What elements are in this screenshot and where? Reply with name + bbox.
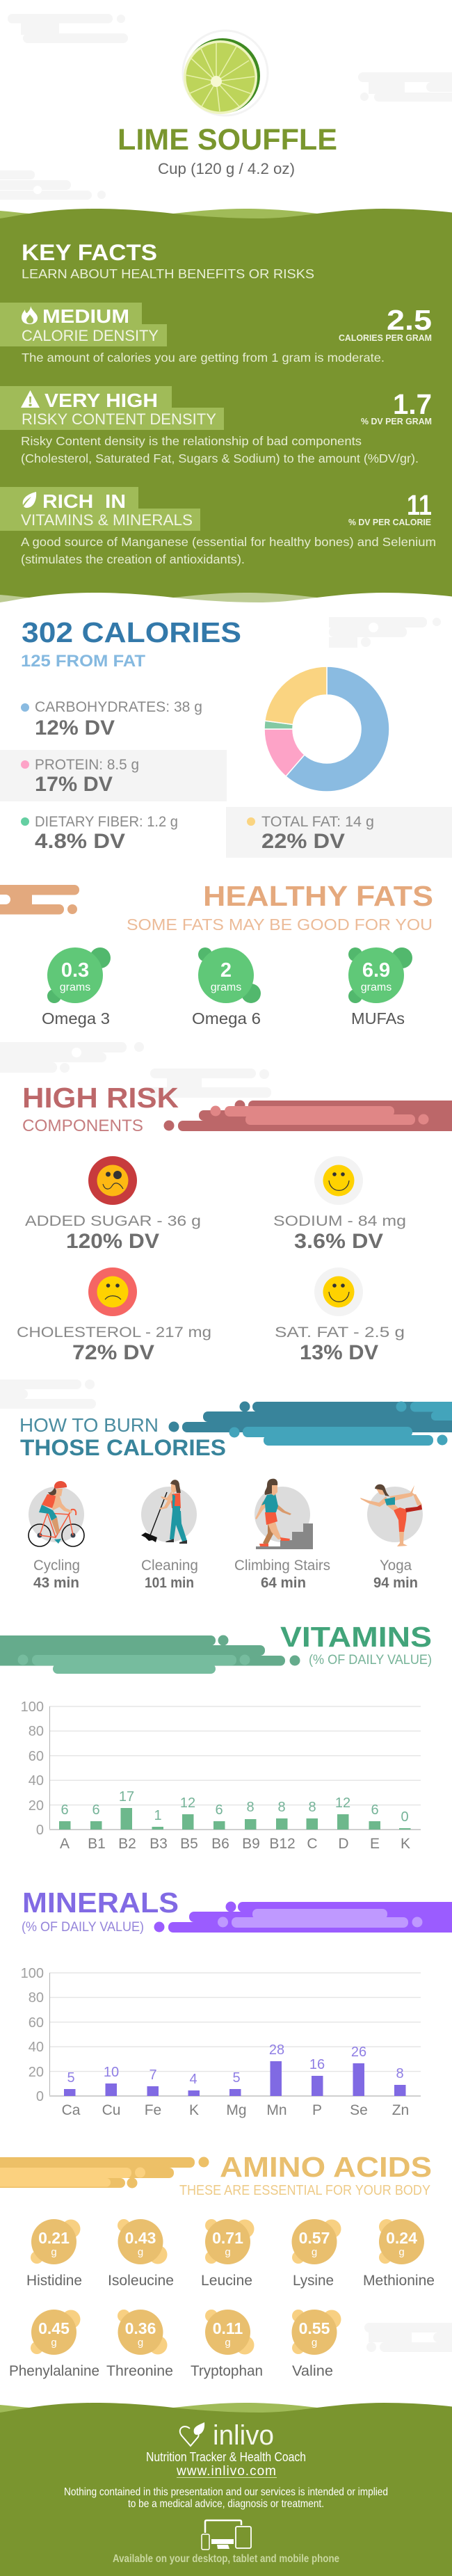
description: risky content: (Cholesterol, Saturated Fat, Sugars & Sodium) to the amount (%DV/gr). <box>21 451 419 465</box>
icon: warning triangle <box>21 390 40 408</box>
bar chart: minerals: 100 <box>21 1966 44 1981</box>
heading: those calories: THOSE CALORIES <box>20 1435 226 1460</box>
activity: cycling: 43 min <box>33 1575 79 1591</box>
protein entry: PROTEIN: 8.5 g <box>35 757 139 773</box>
bar chart: vitamins: K <box>401 1836 410 1852</box>
omega 6 badge: Omega 6 <box>192 1009 261 1027</box>
background clouds: header <box>0 14 452 200</box>
bar chart: minerals: Zn <box>392 2102 409 2118</box>
panel: vitamins <box>21 1621 432 1852</box>
tryptophan badge <box>191 2310 263 2379</box>
activity: climbing stairs: 64 min <box>261 1575 306 1591</box>
isoleucine badge: Isoleucine <box>108 2273 174 2289</box>
bar chart: minerals: Se <box>350 2102 368 2118</box>
heading: how to burn: HOW TO BURN <box>19 1414 159 1436</box>
bar chart: minerals: Mg <box>226 2102 247 2118</box>
leucine badge: 0.71 <box>212 2229 243 2247</box>
bar chart: minerals: 20 <box>29 2065 44 2080</box>
bar chart: vitamins: 80 <box>29 1724 44 1739</box>
icon: desktop tablet and phone <box>202 2520 251 2550</box>
section banner: high risk <box>164 1101 452 1131</box>
lysine badge: 0.57 <box>299 2229 330 2247</box>
tryptophan badge: g <box>225 2337 231 2349</box>
bar chart: minerals: 26 <box>351 2045 366 2060</box>
bar chart: vitamins: 1 <box>154 1808 162 1823</box>
panel: healthy fats <box>42 880 433 1027</box>
leucine badge: Leucine <box>201 2273 252 2289</box>
label boxes: vitamins and minerals <box>0 487 200 531</box>
description: vitamins and minerals: A good source of Manganese (essential for healthy bones) and Selenium <box>21 535 436 549</box>
bar chart: vitamins: B9 <box>242 1836 260 1852</box>
section banner: healthy fats <box>0 885 79 914</box>
bar chart: minerals <box>21 1966 421 2118</box>
bar chart: vitamins: B12 <box>269 1836 296 1852</box>
lysine badge <box>292 2219 341 2289</box>
heading: high risk: HIGH RISK <box>22 1082 179 1114</box>
activity: climbing stairs: Climbing Stairs <box>234 1558 330 1574</box>
phenylalanine badge: g <box>51 2337 57 2349</box>
donut chart <box>264 666 389 792</box>
omega 6 badge: 2 <box>220 959 232 982</box>
bar chart: minerals: 10 <box>104 2065 119 2080</box>
bar chart: minerals: P <box>312 2102 322 2118</box>
panel: minerals <box>21 1887 421 2118</box>
bar chart: vitamins: 20 <box>29 1798 44 1814</box>
subheading: healthy fats: SOME FATS MAY BE GOOD FOR YOU <box>127 915 433 934</box>
section banner: amino acids <box>0 2157 209 2189</box>
dietary fiber entry: DIETARY FIBER: 1.2 g <box>35 814 178 830</box>
bar chart: vitamins: 6 <box>92 1802 100 1818</box>
section banner: minerals <box>154 1902 452 1933</box>
methionine badge: g <box>398 2246 405 2258</box>
background clouds: calories <box>329 617 441 648</box>
bar chart: vitamins: 6 <box>60 1802 69 1818</box>
valine badge <box>292 2310 341 2379</box>
disclaimer: Nothing contained in this presentation and our services is intended or implied <box>64 2486 388 2498</box>
bar chart: minerals: 5 <box>232 2070 241 2086</box>
background clouds: burn calories <box>0 1379 96 1409</box>
threonine badge: 0.36 <box>125 2319 156 2337</box>
serving size: Cup (120 g / 4.2 oz) <box>158 160 295 177</box>
mufas badge <box>348 947 412 1027</box>
valine badge: g <box>312 2337 317 2349</box>
activity: cleaning: 101 min <box>145 1575 194 1591</box>
bar chart: vitamins: 17 <box>119 1789 134 1805</box>
lysine badge: g <box>312 2246 317 2258</box>
rating: rich in: RICH IN <box>42 490 126 512</box>
panel: burn calories <box>19 1414 423 1591</box>
isoleucine badge: g <box>138 2246 143 2258</box>
omega 3 badge: Omega 3 <box>42 1009 110 1027</box>
bar chart: vitamins: 12 <box>180 1795 195 1811</box>
threonine badge: Threonine <box>106 2363 173 2379</box>
bar chart: vitamins: 40 <box>29 1773 44 1789</box>
bar chart: vitamins: E <box>370 1836 380 1852</box>
bar chart: minerals: 60 <box>29 2015 44 2031</box>
section banner: burn calories <box>168 1401 452 1446</box>
heading: minerals: MINERALS <box>22 1887 179 1919</box>
omega 3 badge <box>42 947 111 1027</box>
tagline: Nutrition Tracker & Health Coach <box>146 2449 306 2464</box>
bar chart: minerals: 28 <box>269 2042 284 2058</box>
histidine badge: g <box>51 2246 57 2258</box>
activity: yoga <box>360 1485 423 1591</box>
label boxes: calorie density <box>0 303 167 346</box>
bar chart: minerals: 4 <box>189 2072 197 2087</box>
bar chart: minerals: 40 <box>29 2040 44 2055</box>
heading: key facts: KEY FACTS <box>22 240 157 265</box>
value: 1.7: 1.7 <box>393 388 432 420</box>
subheading: minerals percent of daily value: (% OF DAILY VALUE) <box>22 1919 144 1935</box>
bar chart: vitamins: B2 <box>118 1836 136 1852</box>
bar chart: vitamins: 6 <box>371 1802 379 1818</box>
label: vitamins and minerals: VITAMINS & MINERALS <box>21 511 193 529</box>
omega 3 badge: grams <box>60 982 90 993</box>
bar chart: vitamins: 12 <box>335 1795 350 1811</box>
unit: calories per gram: CALORIES PER GRAM <box>339 333 432 343</box>
unit: percent dv per calorie: % DV PER CALORIE <box>348 518 431 527</box>
sodium entry: SODIUM - 84 mg <box>273 1213 406 1229</box>
activity: cycling <box>29 1481 84 1591</box>
cholesterol entry: 72% DV <box>72 1341 154 1364</box>
lysine badge: Lysine <box>293 2273 334 2289</box>
bar chart: minerals: K <box>189 2102 199 2118</box>
bar chart: vitamins: B5 <box>180 1836 198 1852</box>
added sugar entry: 120% DV <box>66 1230 159 1253</box>
heading: amino acids: AMINO ACIDS <box>220 2151 432 2183</box>
bar chart: vitamins: C <box>307 1836 318 1852</box>
methionine badge <box>363 2219 435 2289</box>
saturated fat entry <box>275 1267 405 1364</box>
bar chart: minerals: 0 <box>36 2089 44 2104</box>
heading: vitamins: VITAMINS <box>280 1621 432 1653</box>
tryptophan badge: 0.11 <box>213 2319 243 2337</box>
carbohydrates entry: CARBOHYDRATES: 38 g <box>35 699 202 715</box>
subheading: amino acids: THESE ARE ESSENTIAL FOR YOUR BODY <box>179 2183 430 2198</box>
label: risky content density: RISKY CONTENT DENSITY <box>22 410 216 428</box>
valine badge: 0.55 <box>299 2319 330 2337</box>
mufas badge: MUFAs <box>351 1009 405 1027</box>
bar chart: minerals: 16 <box>309 2057 325 2072</box>
total fat entry <box>226 807 452 858</box>
subheading: 125 from fat: 125 FROM FAT <box>21 652 145 671</box>
subheading: key facts: LEARN ABOUT HEALTH BENEFITS OR RISKS <box>22 266 314 281</box>
label: calorie density: CALORIE DENSITY <box>22 327 159 344</box>
icon: flame <box>22 306 38 324</box>
rating: medium: MEDIUM <box>42 305 129 327</box>
activity: yoga: Yoga <box>380 1558 412 1574</box>
icon: lime slice <box>183 31 268 115</box>
value: 11: 11 <box>407 489 432 521</box>
bar chart: minerals: 80 <box>29 1990 44 2006</box>
cholesterol entry <box>17 1267 211 1364</box>
sodium entry <box>273 1156 406 1253</box>
panel: amino acids <box>9 2151 435 2379</box>
dietary fiber entry <box>21 814 178 853</box>
bar chart: minerals: Cu <box>102 2102 120 2118</box>
bar chart: vitamins: 6 <box>215 1802 223 1818</box>
heading: 302 calories: 302 CALORIES <box>22 616 241 648</box>
leucine badge <box>201 2219 255 2289</box>
valine badge: Valine <box>292 2363 333 2379</box>
panel: footer <box>0 2403 452 2576</box>
phenylalanine badge: Phenylalanine <box>9 2363 99 2379</box>
added sugar entry: ADDED SUGAR - 36 g <box>25 1213 201 1229</box>
protein entry <box>0 750 227 801</box>
carbohydrates entry <box>21 699 202 739</box>
phenylalanine badge: 0.45 <box>38 2319 70 2337</box>
subheading: vitamins percent of daily value: (% OF DAILY VALUE) <box>309 1652 432 1667</box>
threonine badge: g <box>138 2337 143 2349</box>
unit: percent dv per gram: % DV PER GRAM <box>361 417 432 426</box>
availability note: Available on your desktop, tablet and mobile phone <box>113 2553 339 2565</box>
bar chart: minerals: 7 <box>149 2067 157 2083</box>
sodium entry: 3.6% DV <box>294 1230 383 1253</box>
omega 6 badge <box>192 947 261 1027</box>
description: vitamins and minerals: (stimulates the creation of antioxidants). <box>21 552 245 566</box>
tryptophan badge: Tryptophan <box>191 2363 263 2379</box>
histidine badge: 0.21 <box>38 2229 70 2247</box>
cholesterol entry: CHOLESTEROL - 217 mg <box>17 1325 211 1341</box>
saturated fat entry: 13% DV <box>300 1341 378 1364</box>
label boxes: risky content <box>0 386 224 430</box>
value: 2.5: 2.5 <box>387 304 432 336</box>
description: risky content: Risky Content density is the relationship of bad components <box>21 434 362 448</box>
background clouds: high risk <box>0 1042 271 1098</box>
background cloud: amino acids <box>364 2323 452 2352</box>
total fat entry: 22% DV <box>261 830 345 853</box>
bar chart: vitamins: B3 <box>150 1836 168 1852</box>
omega 3 badge: 0.3 <box>61 959 89 982</box>
leucine badge: g <box>225 2246 231 2258</box>
histidine badge <box>26 2219 82 2289</box>
description: calorie density: The amount of calories you are getting from 1 gram is moderate. <box>22 351 385 365</box>
icon: inlivo heart logo <box>180 2422 204 2446</box>
bar chart: minerals: Mn <box>266 2102 287 2118</box>
subheading: components: COMPONENTS <box>22 1117 143 1135</box>
bar chart: vitamins: A <box>60 1836 70 1852</box>
protein entry: 17% DV <box>35 773 113 796</box>
description: risky content <box>21 434 419 465</box>
website link: www.inlivo.com <box>176 2464 276 2479</box>
panel: calories <box>0 616 452 858</box>
disclaimer: to be a medical advice, diagnosis or treatment. <box>128 2498 324 2510</box>
section banner: vitamins <box>0 1635 300 1674</box>
bar chart: vitamins: 8 <box>308 1800 316 1815</box>
bar chart: minerals: 8 <box>396 2066 404 2081</box>
bar chart: vitamins: D <box>338 1836 349 1852</box>
added sugar entry <box>25 1156 201 1253</box>
disclaimer <box>64 2486 388 2510</box>
activity: climbing stairs <box>234 1479 330 1591</box>
saturated fat entry: SAT. FAT - 2.5 g <box>275 1325 405 1341</box>
activity: yoga: 94 min <box>373 1575 418 1591</box>
bar chart: vitamins <box>21 1699 421 1852</box>
icon: leaf <box>23 492 36 508</box>
bar chart: minerals: Ca <box>62 2102 81 2118</box>
methionine badge: 0.24 <box>386 2229 417 2247</box>
bar chart: minerals: Fe <box>145 2102 161 2118</box>
description: vitamins and minerals <box>21 535 436 566</box>
mufas badge: grams <box>361 982 392 993</box>
bar chart: vitamins: 100 <box>21 1699 44 1715</box>
heading: healthy fats: HEALTHY FATS <box>203 880 433 912</box>
isoleucine badge <box>108 2219 174 2289</box>
methionine badge: Methionine <box>363 2273 435 2289</box>
bar chart: vitamins: B6 <box>211 1836 229 1852</box>
bar chart: minerals: 5 <box>67 2070 75 2086</box>
phenylalanine badge <box>9 2310 99 2379</box>
bar chart: vitamins: 8 <box>246 1800 255 1815</box>
histidine badge: Histidine <box>26 2273 82 2289</box>
activity: cleaning <box>141 1480 198 1591</box>
activity: cleaning: Cleaning <box>141 1558 198 1574</box>
bar chart: vitamins: 8 <box>277 1800 286 1815</box>
bar chart: vitamins: B1 <box>88 1836 106 1852</box>
threonine badge <box>106 2310 173 2379</box>
title: LIME SOUFFLE <box>118 123 337 157</box>
activity: cycling: Cycling <box>33 1558 80 1574</box>
rating: very high: VERY HIGH <box>45 390 158 411</box>
isoleucine badge: 0.43 <box>125 2229 156 2247</box>
bar chart: vitamins: 0 <box>36 1823 44 1838</box>
mufas badge: 6.9 <box>362 959 390 982</box>
carbohydrates entry: 12% DV <box>35 717 115 739</box>
omega 6 badge: grams <box>211 982 241 993</box>
bar chart: vitamins: 60 <box>29 1749 44 1764</box>
bar chart: vitamins: 0 <box>401 1809 409 1825</box>
dietary fiber entry: 4.8% DV <box>35 830 125 853</box>
logo wordmark: inlivo <box>213 2420 274 2451</box>
panel: key facts <box>0 209 452 612</box>
panel: high risk <box>17 1082 406 1364</box>
total fat entry: TOTAL FAT: 14 g <box>261 814 374 830</box>
